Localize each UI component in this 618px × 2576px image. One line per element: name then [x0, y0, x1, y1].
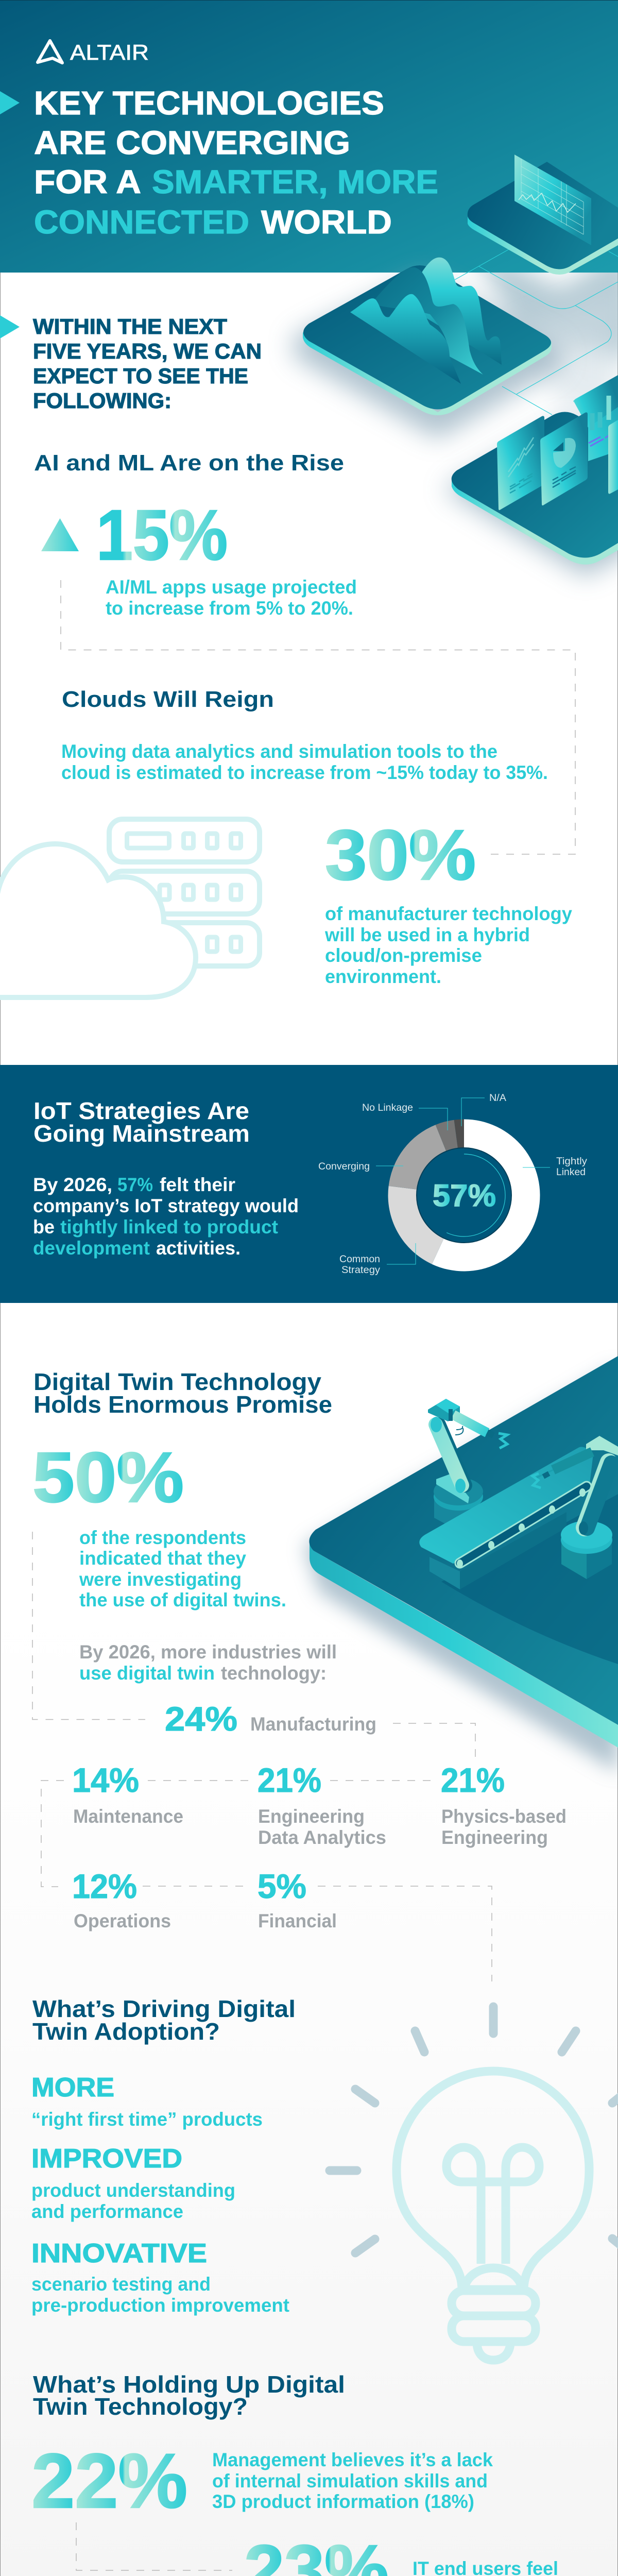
label: Tightly Linked: [523, 1156, 588, 1178]
stat: physics-based engineering: Engineering: [441, 1827, 548, 1848]
card: line chart: [497, 416, 544, 510]
card: pie chart: [540, 412, 588, 505]
label: N/A: [461, 1093, 506, 1126]
title: WORLD: [261, 204, 392, 241]
description: cloud is estimated to increase from ~15% today to 35%.: [61, 762, 548, 783]
title: KEY TECHNOLOGIES: [34, 84, 384, 122]
heading: [33, 2371, 345, 2420]
heading: Twin Adoption?: [32, 2018, 220, 2045]
panel: IoT strategies: [0, 1065, 618, 1303]
stat: manufacturing: 24%: [165, 1700, 237, 1738]
stat: physics-based engineering: 21%: [441, 1761, 505, 1799]
factory illustration: [304, 1356, 618, 1772]
body text: [33, 1174, 299, 1259]
stat 15%: 15%: [96, 496, 228, 575]
driver: more: [31, 2073, 263, 2130]
arrow marker: [0, 91, 20, 114]
connector lines: [455, 249, 618, 415]
subtitle: EXPECT TO SEE THE: [33, 364, 248, 388]
stat: engineering data analytics: Data Analytics: [258, 1827, 386, 1848]
industry intro: technology:: [221, 1663, 327, 1684]
robot arm: front: [533, 1436, 618, 1579]
label: No Linkage: No Linkage: [362, 1103, 413, 1113]
heading: Holds Enormous Promise: [33, 1391, 332, 1418]
description: to increase from 5% to 20%.: [106, 598, 353, 619]
driver: innovative: INNOVATIVE: [31, 2239, 207, 2268]
subtitle: [33, 314, 262, 413]
body text: 57%: [117, 1174, 153, 1195]
body text: development: [33, 1238, 150, 1259]
label: Tightly Linked: Tightly: [556, 1156, 588, 1167]
icon: up triangle: [41, 518, 79, 551]
label: Common Strategy: Strategy: [341, 1265, 381, 1276]
label: Tightly Linked: Linked: [556, 1167, 586, 1178]
section: holding up: [31, 2371, 587, 2576]
stat: maintenance: Maintenance: [73, 1806, 183, 1827]
industry intro: By 2026, more industries will: [79, 1641, 337, 1663]
stat: engineering data analytics: Engineering: [258, 1806, 365, 1827]
label: Common Strategy: Common: [339, 1254, 380, 1265]
description: Management believes it’s a lack: [212, 2449, 493, 2470]
card: partial right: [608, 420, 618, 494]
title: FOR A: [34, 163, 141, 200]
body text: be: [33, 1216, 55, 1238]
stat: physics-based engineering: [441, 1761, 566, 1848]
icon: light bulb: [330, 2007, 618, 2360]
stat: manufacturing: Manufacturing: [250, 1714, 376, 1735]
lower platform with report cards: [452, 375, 618, 565]
heading: [32, 1995, 296, 2045]
description: [324, 903, 572, 987]
description: indicated that they: [79, 1548, 246, 1569]
arrow marker: [0, 315, 20, 338]
description: the use of digital twins.: [79, 1589, 286, 1611]
description: will be used in a hybrid: [324, 924, 530, 945]
driver: improved: IMPROVED: [31, 2144, 182, 2174]
heading: Twin Technology?: [33, 2393, 248, 2420]
logo: [38, 40, 149, 64]
title: SMARTER, MORE: [152, 163, 438, 200]
driver: improved: and performance: [31, 2201, 183, 2222]
label: N/A: N/A: [489, 1093, 506, 1104]
stat 22%: 22%: [31, 2437, 187, 2524]
industry intro: [79, 1641, 337, 1684]
conveyor belt: [419, 1447, 593, 1589]
description: cloud/on-premise: [325, 945, 482, 966]
stat: engineering data analytics: [258, 1761, 386, 1848]
subtitle: WITHIN THE NEXT: [33, 314, 227, 338]
heading: What’s Driving Digital: [32, 1995, 296, 2022]
heading: IoT Strategies Are: [33, 1097, 249, 1124]
body text: tightly linked to product: [60, 1216, 278, 1238]
stat: maintenance: 14%: [72, 1761, 139, 1799]
stat: operations: [72, 1867, 171, 1931]
middle platform with waves: [303, 258, 552, 415]
label: No Linkage: [362, 1103, 448, 1130]
stat: operations: 12%: [72, 1867, 137, 1905]
heading: Going Mainstream: [33, 1120, 250, 1147]
section: AI and ML: [34, 450, 357, 619]
driver: innovative: [31, 2239, 289, 2316]
logo: ALTAIR: [70, 40, 149, 64]
section: clouds: [0, 687, 572, 997]
stat: financial: 5%: [258, 1867, 306, 1905]
subtitle: FIVE YEARS, WE CAN: [33, 339, 262, 363]
wave chart: [350, 258, 502, 384]
stat: operations: Operations: [74, 1910, 171, 1931]
stat: financial: [258, 1867, 337, 1931]
stat: engineering data analytics: 21%: [258, 1761, 321, 1799]
heading: AI and ML Are on the Rise: [34, 450, 344, 476]
description: [106, 577, 357, 619]
donut chart: [318, 1093, 588, 1276]
stat: financial: Financial: [258, 1910, 337, 1931]
card: bar chart: [573, 375, 618, 461]
heading: [33, 1097, 250, 1147]
label: Common Strategy: [339, 1243, 416, 1276]
body text: By 2026,: [33, 1174, 112, 1195]
driver: more: “right first time” products: [31, 2109, 263, 2130]
description: of internal simulation skills and: [212, 2470, 488, 2492]
stat: physics-based engineering: Physics-based: [441, 1806, 566, 1827]
section: digital twin: [32, 1368, 566, 1981]
header panel: [0, 0, 618, 273]
description: [61, 741, 548, 783]
isometric data illustration: [294, 155, 618, 577]
icon: servers and cloud: [0, 819, 260, 997]
driver: improved: product understanding: [31, 2180, 235, 2201]
description: Moving data analytics and simulation tools to the: [61, 741, 497, 762]
robot arm: back: [428, 1399, 507, 1528]
heading: [33, 1368, 332, 1418]
description: [79, 1527, 286, 1611]
heading: What’s Holding Up Digital: [33, 2371, 345, 2398]
body text: felt their: [160, 1174, 235, 1195]
driver: more: MORE: [31, 2073, 114, 2103]
description: of manufacturer technology: [325, 903, 572, 924]
driver: innovative: pre-production improvement: [31, 2295, 289, 2316]
top platform with screen: [468, 155, 618, 275]
description: 3D product information (18%): [212, 2491, 474, 2512]
industry intro: use digital twin: [79, 1663, 215, 1684]
driver: improved: [31, 2144, 235, 2222]
centre value: 57%: [433, 1178, 496, 1213]
stat 50%: 50%: [32, 1438, 184, 1517]
title: [34, 84, 438, 241]
stat 30%: 30%: [325, 816, 476, 895]
title: ARE CONVERGING: [34, 124, 350, 161]
driver: innovative: scenario testing and: [31, 2274, 211, 2295]
heading: Clouds Will Reign: [62, 687, 274, 712]
description: [212, 2449, 493, 2512]
platform: [309, 1356, 618, 1748]
description: AI/ML apps usage projected: [106, 577, 357, 598]
description: were investigating: [79, 1569, 242, 1590]
chart screen: [514, 155, 591, 245]
heading: Digital Twin Technology: [33, 1368, 321, 1395]
subtitle: FOLLOWING:: [33, 388, 171, 413]
rays: [330, 2007, 618, 2253]
label: Converging: Converging: [318, 1161, 370, 1172]
section: driving adoption: [31, 1995, 618, 2360]
body text: company’s IoT strategy would: [33, 1195, 299, 1216]
body text: activities.: [156, 1238, 241, 1259]
inner arc: [447, 1154, 505, 1236]
description: of the respondents: [79, 1527, 246, 1548]
stat: maintenance: [72, 1761, 183, 1827]
stat: manufacturing: [165, 1700, 376, 1738]
description: environment.: [325, 966, 441, 987]
title: CONNECTED: [34, 204, 249, 241]
